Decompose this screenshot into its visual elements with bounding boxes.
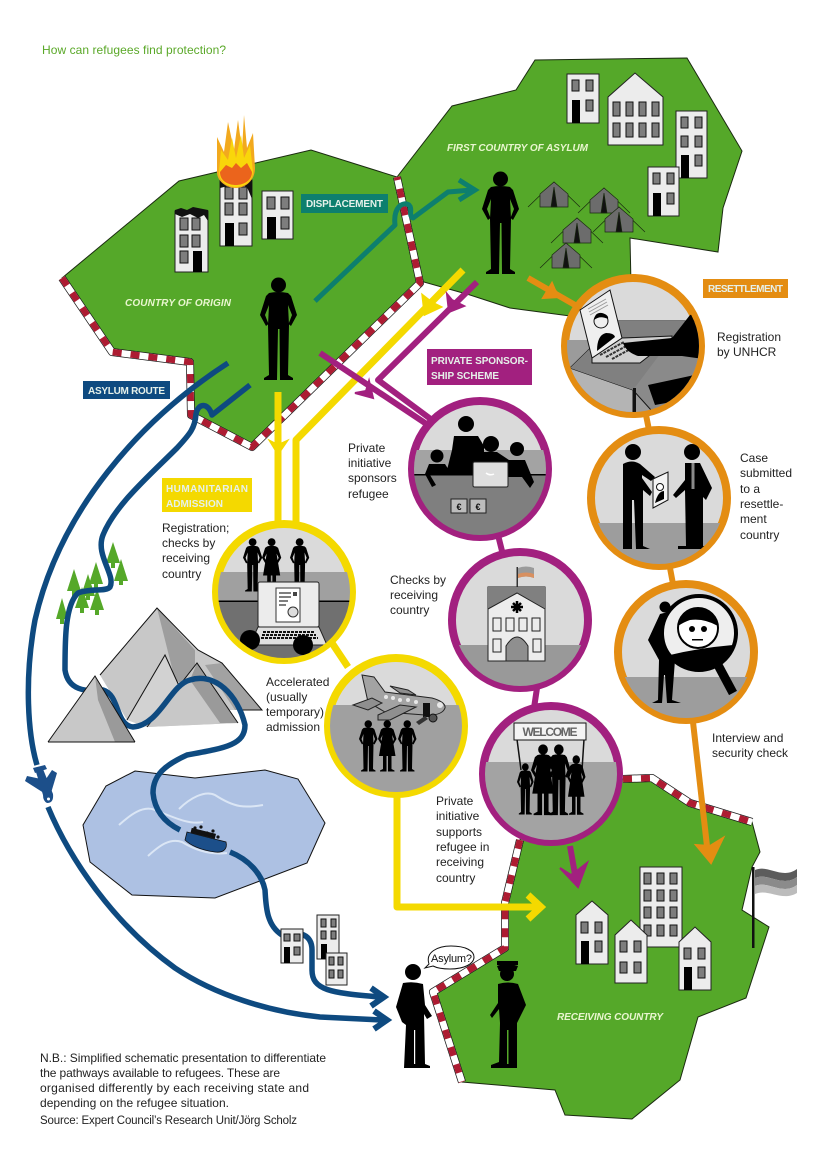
text: registration checks by receiving country: country — [162, 567, 201, 581]
circle: registration by receiving country — [210, 524, 360, 661]
circle: case submitted — [580, 430, 740, 573]
tag: displacement: DISPLACEMENT — [306, 199, 383, 210]
buildings: receiving country — [576, 867, 711, 990]
tag: humanitarian admission — [162, 478, 252, 512]
text: private initiative supports refugee: Private — [436, 794, 474, 808]
route: displacement (teal) — [315, 180, 475, 301]
footnote: organised differently by each receiving state and — [40, 1081, 309, 1095]
icon: mountains — [100, 608, 262, 727]
buildings: first country — [567, 73, 707, 216]
text: accelerated admission: (usually — [266, 690, 307, 704]
icon: flames — [217, 115, 255, 188]
text: registration checks by receiving country: receiving — [162, 551, 210, 565]
footnote: Source: Expert Council’s Research Unit/Jörg Scholz — [40, 1115, 297, 1127]
icon: forest — [56, 542, 128, 624]
text: interview and security check: Interview and — [712, 731, 783, 745]
borders: red and white frontier lines — [62, 177, 752, 1082]
text: accelerated admission: Accelerated — [266, 675, 329, 689]
tag: humanitarian admission: ADMISSION — [166, 499, 223, 510]
text: private initiative supports refugee: supports — [436, 825, 482, 839]
footnote: the pathways available to refugees. These are — [40, 1066, 280, 1080]
circle: accelerated admission — [320, 658, 470, 795]
circle: private initiative supports refugee: WELCOME — [522, 725, 578, 739]
circle: interview and security check — [610, 584, 770, 727]
text: private initiative sponsors refugee: sponsors — [348, 471, 397, 485]
label: receiving country: RECEIVING COUNTRY — [557, 1012, 664, 1023]
circle: registration by UNHCR — [560, 278, 710, 428]
text: registration checks by receiving country: Registration; — [162, 521, 229, 535]
tag: resettlement: RESETTLEMENT — [708, 284, 783, 295]
figure: refugee in first country — [482, 172, 519, 274]
label: first country of asylum: FIRST COUNTRY OF ASYLUM — [447, 143, 589, 154]
text: accelerated admission: admission — [266, 720, 320, 734]
text: private initiative supports refugee: refugee in — [436, 840, 489, 854]
icon: front mountain — [48, 676, 135, 742]
text: private initiative sponsors refugee: refugee — [348, 487, 389, 501]
icon: flag of receiving country — [752, 867, 797, 948]
panel: receiving country — [433, 770, 769, 1119]
text: private initiative supports refugee: initiative — [436, 809, 480, 823]
circle: private initiative sponsors refugee: € — [456, 502, 462, 512]
text: case submitted: ment — [740, 512, 767, 526]
text: case submitted: Case — [740, 451, 768, 465]
buildings: transit town — [281, 915, 347, 985]
route: asylum by air (blue) — [28, 363, 387, 1029]
tag: humanitarian admission: HUMANITARIAN — [166, 484, 248, 495]
icon: refugee tents — [528, 182, 645, 268]
text: private initiative sponsors refugee: Private — [348, 441, 386, 455]
icon: airplane — [25, 765, 57, 803]
icon: lake — [83, 770, 325, 898]
text: case submitted: submitted — [740, 466, 792, 480]
text: checks by receiving country: country — [390, 603, 429, 617]
figure: refugee in country of origin — [260, 278, 297, 380]
tag: private sponsorship scheme — [427, 349, 532, 385]
route: humanitarian admission (yellow) — [270, 270, 541, 919]
text: private initiative supports refugee: receiving — [436, 855, 484, 869]
speech bubble: asylum question: Asylum? — [431, 953, 472, 965]
text: accelerated admission: temporary) — [266, 705, 324, 719]
text: case submitted: country — [740, 528, 779, 542]
route: asylum overland (blue) — [65, 385, 384, 1006]
text: case submitted: resettle- — [740, 497, 783, 511]
tag: private sponsorship scheme: SHIP SCHEME — [431, 371, 499, 382]
panel: first country of asylum — [397, 58, 742, 320]
text: registration checks by receiving country: checks by — [162, 536, 215, 550]
tag: private sponsorship scheme: PRIVATE SPONSOR- — [431, 356, 528, 367]
circle: private initiative supports refugee — [480, 706, 630, 852]
text: registration by UNHCR: Registration — [717, 330, 781, 344]
text: case submitted: to a — [740, 482, 760, 496]
tag: asylum route — [83, 381, 170, 399]
text: private initiative sponsors refugee: initiative — [348, 456, 392, 470]
route: resettlement (orange) — [528, 278, 723, 863]
tag: displacement — [301, 194, 388, 213]
text: private initiative supports refugee: country — [436, 871, 475, 885]
title: How can refugees find protection? — [42, 43, 226, 57]
route: private sponsorship (purple) — [320, 282, 587, 887]
text: checks by receiving country: receiving — [390, 588, 438, 602]
footnote — [40, 1051, 326, 1127]
text: interview and security check: security check — [712, 746, 789, 760]
tag: resettlement — [703, 279, 788, 298]
buildings: damaged houses — [175, 180, 293, 272]
text: registration by UNHCR: by UNHCR — [717, 345, 777, 359]
icon: boat with refugees — [185, 825, 226, 852]
label: country of origin: COUNTRY OF ORIGIN — [125, 298, 232, 309]
text: checks by receiving country: Checks by — [390, 573, 446, 587]
circle: checks by receiving country (purple) — [450, 552, 590, 695]
circle: private initiative sponsors refugee — [410, 401, 550, 545]
tag: asylum route: ASYLUM ROUTE — [88, 386, 165, 397]
footnote: depending on the refugee situation. — [40, 1096, 229, 1110]
figure: border officer — [490, 961, 526, 1068]
figure: refugee asking for asylum — [396, 964, 432, 1068]
circle: private initiative sponsors refugee: € — [475, 502, 481, 512]
speech bubble: asylum question — [425, 946, 474, 969]
panel: country of origin — [62, 115, 420, 447]
footnote: N.B.: Simplified schematic presentation to differentiate — [40, 1051, 326, 1065]
